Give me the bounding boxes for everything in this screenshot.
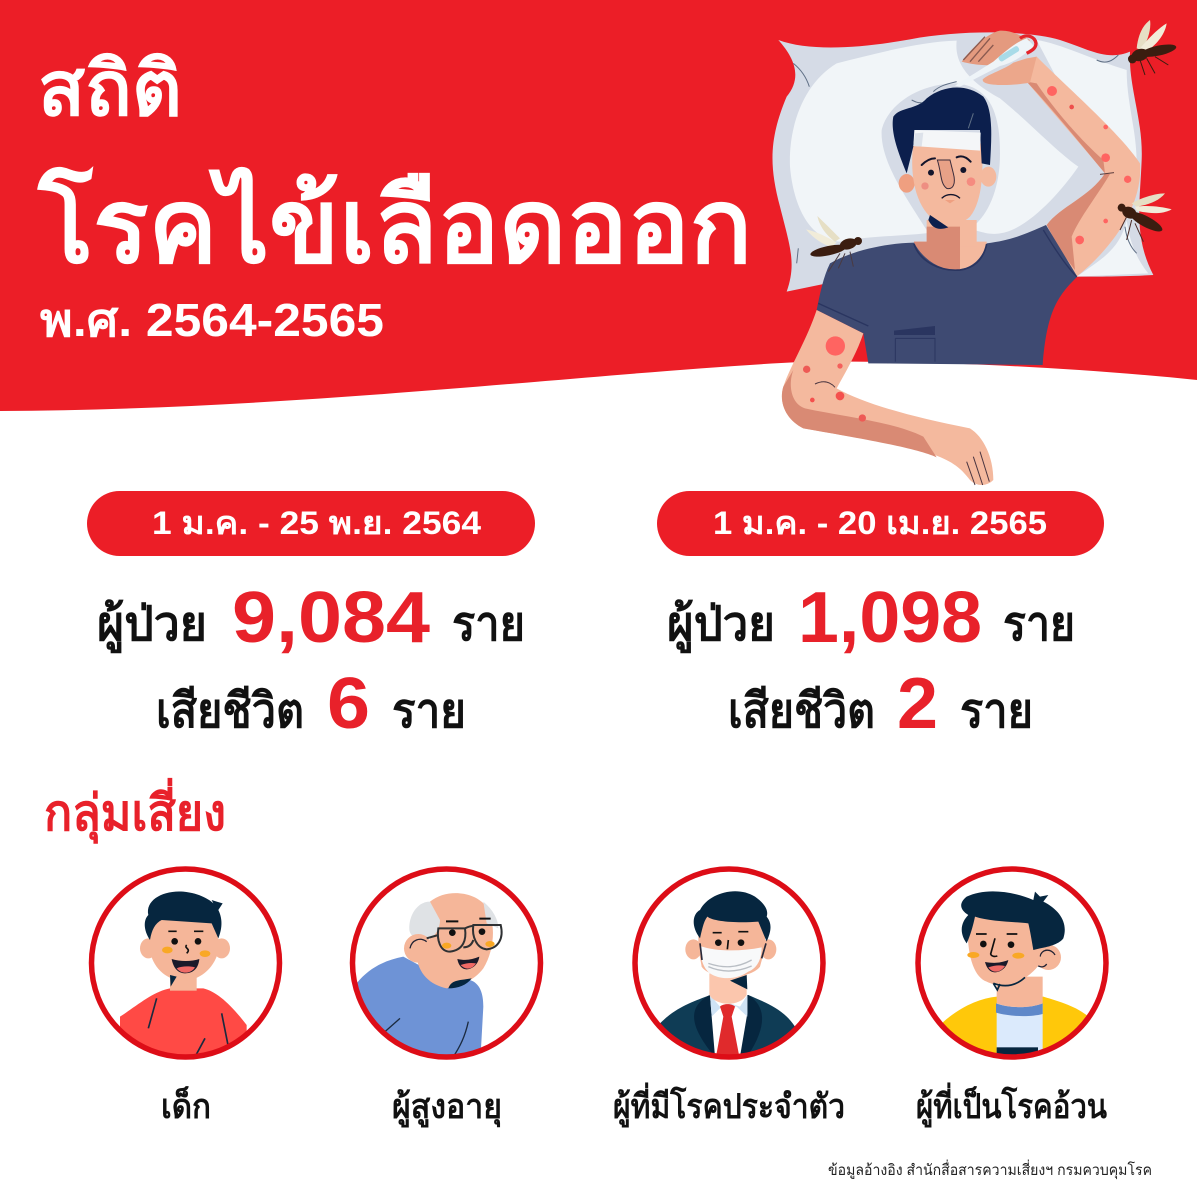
title: [37, 47, 752, 346]
deaths 2564: ราย: [392, 685, 466, 738]
illustration: sick man on pillow: [772, 20, 1177, 485]
panel: obesity: [916, 869, 1107, 1128]
date pill 2564: [87, 491, 535, 556]
label: chronic illness: ผู้ที่มีโรคประจำตัว: [613, 1082, 845, 1128]
red circle ring: [352, 869, 540, 1057]
title line: year: พ.ศ. 2564-2565: [40, 294, 384, 346]
panel: chronic illness: [613, 869, 845, 1128]
pillow: [772, 32, 1153, 292]
t-shirt: [817, 225, 1077, 365]
patients 2565: ผู้ป่วย: [667, 598, 775, 654]
lower arm: [782, 310, 993, 485]
hand fingers: [962, 31, 1030, 65]
icon: man with mask avatar: [660, 891, 795, 1067]
hand thumb: [983, 57, 1037, 85]
date pill 2565: [657, 491, 1104, 556]
panel: 2565 stats: [657, 491, 1104, 744]
heading: risk groups: กลุ่มเสี่ยง: [44, 778, 226, 844]
patients 2565: [667, 578, 1075, 658]
deaths 2565: 2: [897, 664, 938, 744]
red circle ring: [635, 869, 823, 1057]
mosquito: left: [806, 216, 862, 272]
deaths 2565: ราย: [960, 685, 1033, 738]
panel: child: [92, 869, 280, 1126]
label: elderly: ผู้สูงอายุ: [392, 1088, 502, 1128]
patients 2565: 1,098: [798, 578, 982, 658]
raised arm: [1027, 57, 1140, 277]
icon: elderly avatar: [357, 893, 502, 1067]
title line: สถิติ: สถิติ: [38, 47, 182, 132]
head and face: [893, 82, 996, 275]
mosquito: top right: [1128, 20, 1177, 75]
patients 2564: 9,084: [232, 578, 430, 658]
label: child: เด็ก: [161, 1085, 211, 1126]
date pill 2565: 1 ม.ค. - 20 เม.ย. 2565: [713, 505, 1047, 541]
title line: โรคไข้เลือดออก: โรคไข้เลือดออก: [37, 166, 752, 285]
mosquito: right: [1118, 193, 1172, 242]
label: obesity: ผู้ที่เป็นโรคอ้วน: [916, 1082, 1107, 1128]
patients 2564: ผู้ป่วย: [97, 598, 207, 654]
deaths 2564: เสียชีวิต: [156, 685, 304, 738]
deaths 2564: 6: [327, 664, 370, 744]
deaths 2564: [156, 664, 466, 744]
patients 2564: [97, 578, 525, 658]
patients 2564: ราย: [452, 598, 525, 651]
red header band: [0, 0, 1197, 411]
deaths 2565: [728, 664, 1033, 744]
panel: 2564 stats: [87, 491, 535, 744]
date pill 2564: 1 ม.ค. - 25 พ.ย. 2564: [152, 505, 481, 541]
icon: young man avatar: [942, 891, 1088, 1067]
panel: elderly: [352, 869, 540, 1128]
icon: child avatar: [120, 891, 247, 1067]
patients 2565: ราย: [1003, 598, 1075, 651]
source note: ข้อมูลอ้างอิง สำนักสื่อสารความเสี่ยงฯ กรมควบคุมโรค: [828, 1159, 1152, 1180]
red circle ring: [918, 869, 1106, 1057]
deaths 2565: เสียชีวิต: [728, 685, 875, 738]
red circle ring: [92, 869, 280, 1057]
thermometer: [955, 36, 1036, 87]
